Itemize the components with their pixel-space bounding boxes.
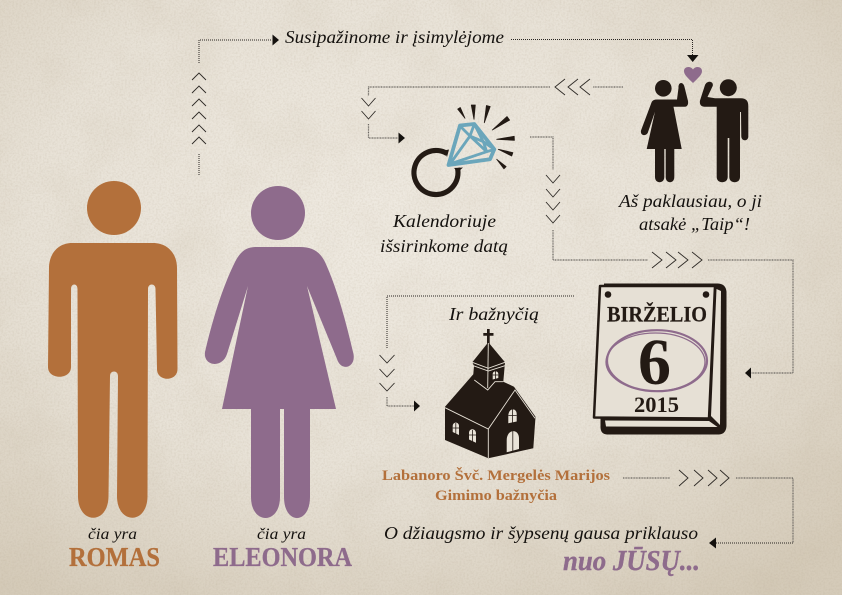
icon: couple <box>641 79 748 182</box>
label: Romas: čia yra <box>88 526 137 543</box>
text: church name <box>382 467 610 504</box>
calendar circle mark <box>606 330 707 391</box>
arrow: to couple <box>511 40 698 62</box>
text: church name: Labanoro Švč. Mergelės Marijos <box>382 467 610 484</box>
text: closing message: O džiaugsmo ir šypsenų gausa priklauso <box>384 523 698 543</box>
text: met and fell in love: Susipažinome ir įsimylėjome <box>285 27 504 47</box>
calendar year: 2015 <box>634 392 679 417</box>
text: church name: Gimimo bažnyčia <box>435 488 558 504</box>
text: I asked, she said yes: atsakė „Taip“! <box>639 214 750 234</box>
text: and the church: Ir bažnyčią <box>448 304 539 324</box>
calendar day: 6 <box>638 326 671 399</box>
text: I asked, she said yes: Aš paklausiau, o ji <box>618 191 762 211</box>
label: Eleonora: ELEONORA <box>213 542 352 572</box>
arrow: couple to ring <box>362 79 623 144</box>
icon: calendar <box>594 284 726 434</box>
icon: heart <box>684 67 702 83</box>
icon: church <box>445 329 536 458</box>
label: Eleonora: čia yra <box>257 526 306 543</box>
calendar month: BIRŽELIO <box>607 301 707 327</box>
text: I asked, she said yes <box>618 191 762 234</box>
text: chose a date in the calendar: išsirinkome datą <box>380 236 508 256</box>
arrow: ring to calendar <box>530 137 793 378</box>
label: Romas: ROMAS <box>69 542 160 572</box>
icon: diamond ring <box>414 105 514 195</box>
text: chose a date in the calendar <box>380 211 508 256</box>
text: chose a date in the calendar: Kalendoriuje <box>392 211 496 231</box>
label: Eleonora <box>213 526 352 572</box>
arrow: up to first meeting <box>192 34 279 175</box>
figure: Eleonora <box>205 186 354 518</box>
text: from you: nuo JŪSŲ... <box>563 546 700 577</box>
arrow: calendar to church <box>380 296 574 412</box>
arrow: church to final message <box>623 470 793 548</box>
figure: Romas <box>48 181 178 518</box>
label: Romas <box>69 526 160 572</box>
